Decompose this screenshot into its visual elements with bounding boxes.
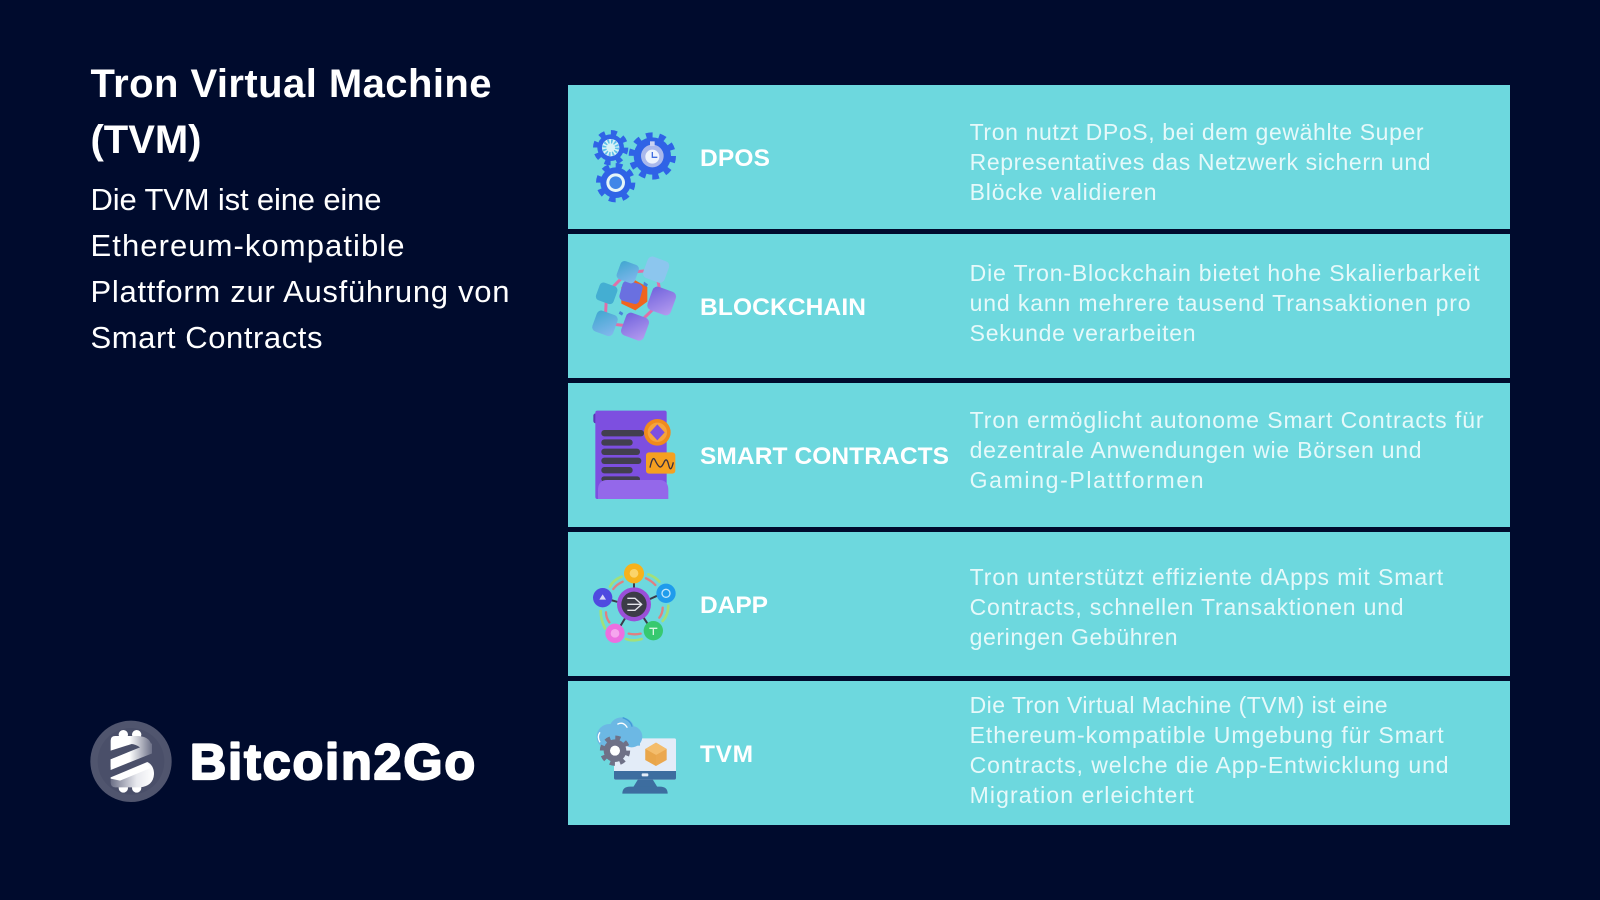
description: Migration erleichtert bbox=[970, 782, 1194, 808]
description: Contracts, schnellen Transaktionen und bbox=[970, 594, 1404, 620]
description: geringen Gebühren bbox=[970, 624, 1178, 650]
description: Representatives das Netzwerk sichern und bbox=[970, 149, 1431, 175]
intro text: Smart Contracts bbox=[90, 320, 322, 355]
icon: contract scroll bbox=[593, 411, 675, 499]
description: Die Tron Virtual Machine (TVM) ist eine bbox=[970, 692, 1388, 718]
description: Contracts, welche die App-Entwicklung und bbox=[970, 752, 1449, 778]
description: und kann mehrere tausend Transaktionen pro bbox=[970, 290, 1471, 316]
intro text: Die TVM ist eine eine bbox=[90, 182, 382, 217]
panel: SMART CONTRACTS bbox=[568, 383, 1510, 527]
description: Die Tron-Blockchain bietet hohe Skalierbarkeit bbox=[970, 260, 1480, 286]
description bbox=[970, 260, 1480, 346]
intro text: Plattform zur Ausführung von bbox=[90, 274, 510, 309]
description bbox=[970, 407, 1484, 493]
panel: BLOCKCHAIN bbox=[568, 234, 1510, 378]
description: Blöcke validieren bbox=[970, 179, 1157, 205]
label: SMART CONTRACTS bbox=[700, 443, 949, 470]
title: Tron Virtual Machine bbox=[90, 62, 492, 106]
description: Gaming-Plattformen bbox=[970, 467, 1204, 493]
description: Ethereum-kompatible Umgebung für Smart bbox=[970, 722, 1444, 748]
logo: Bitcoin2Go bbox=[90, 721, 475, 802]
intro text bbox=[90, 182, 510, 355]
icon: blockchain cubes bbox=[591, 255, 677, 342]
description bbox=[970, 119, 1431, 205]
panel: DPOS bbox=[568, 85, 1510, 229]
icon: gears bbox=[596, 133, 673, 200]
panel: DAPP bbox=[568, 532, 1510, 676]
description bbox=[970, 692, 1449, 808]
logo wordmark: Bitcoin2Go bbox=[190, 734, 475, 790]
icon: dapp network bbox=[593, 563, 676, 643]
title: (TVM) bbox=[90, 118, 202, 162]
panel: TVM bbox=[568, 681, 1510, 825]
label: DPOS bbox=[700, 145, 770, 172]
description: Sekunde verarbeiten bbox=[970, 320, 1196, 346]
description: Tron nutzt DPoS, bei dem gewählte Super bbox=[970, 119, 1424, 145]
description: dezentrale Anwendungen wie Börsen und bbox=[970, 437, 1422, 463]
intro text: Ethereum-kompatible bbox=[90, 228, 404, 263]
label: TVM bbox=[700, 741, 753, 768]
description: Tron ermöglicht autonome Smart Contracts für bbox=[970, 407, 1484, 433]
description: Tron unterstützt effiziente dApps mit Smart bbox=[970, 564, 1444, 590]
label: DAPP bbox=[700, 592, 768, 619]
label: BLOCKCHAIN bbox=[700, 294, 866, 321]
icon: bitcoin logo mark bbox=[90, 721, 172, 802]
title bbox=[90, 62, 492, 162]
icon: cloud gear monitor bbox=[597, 717, 676, 794]
description bbox=[970, 564, 1444, 650]
